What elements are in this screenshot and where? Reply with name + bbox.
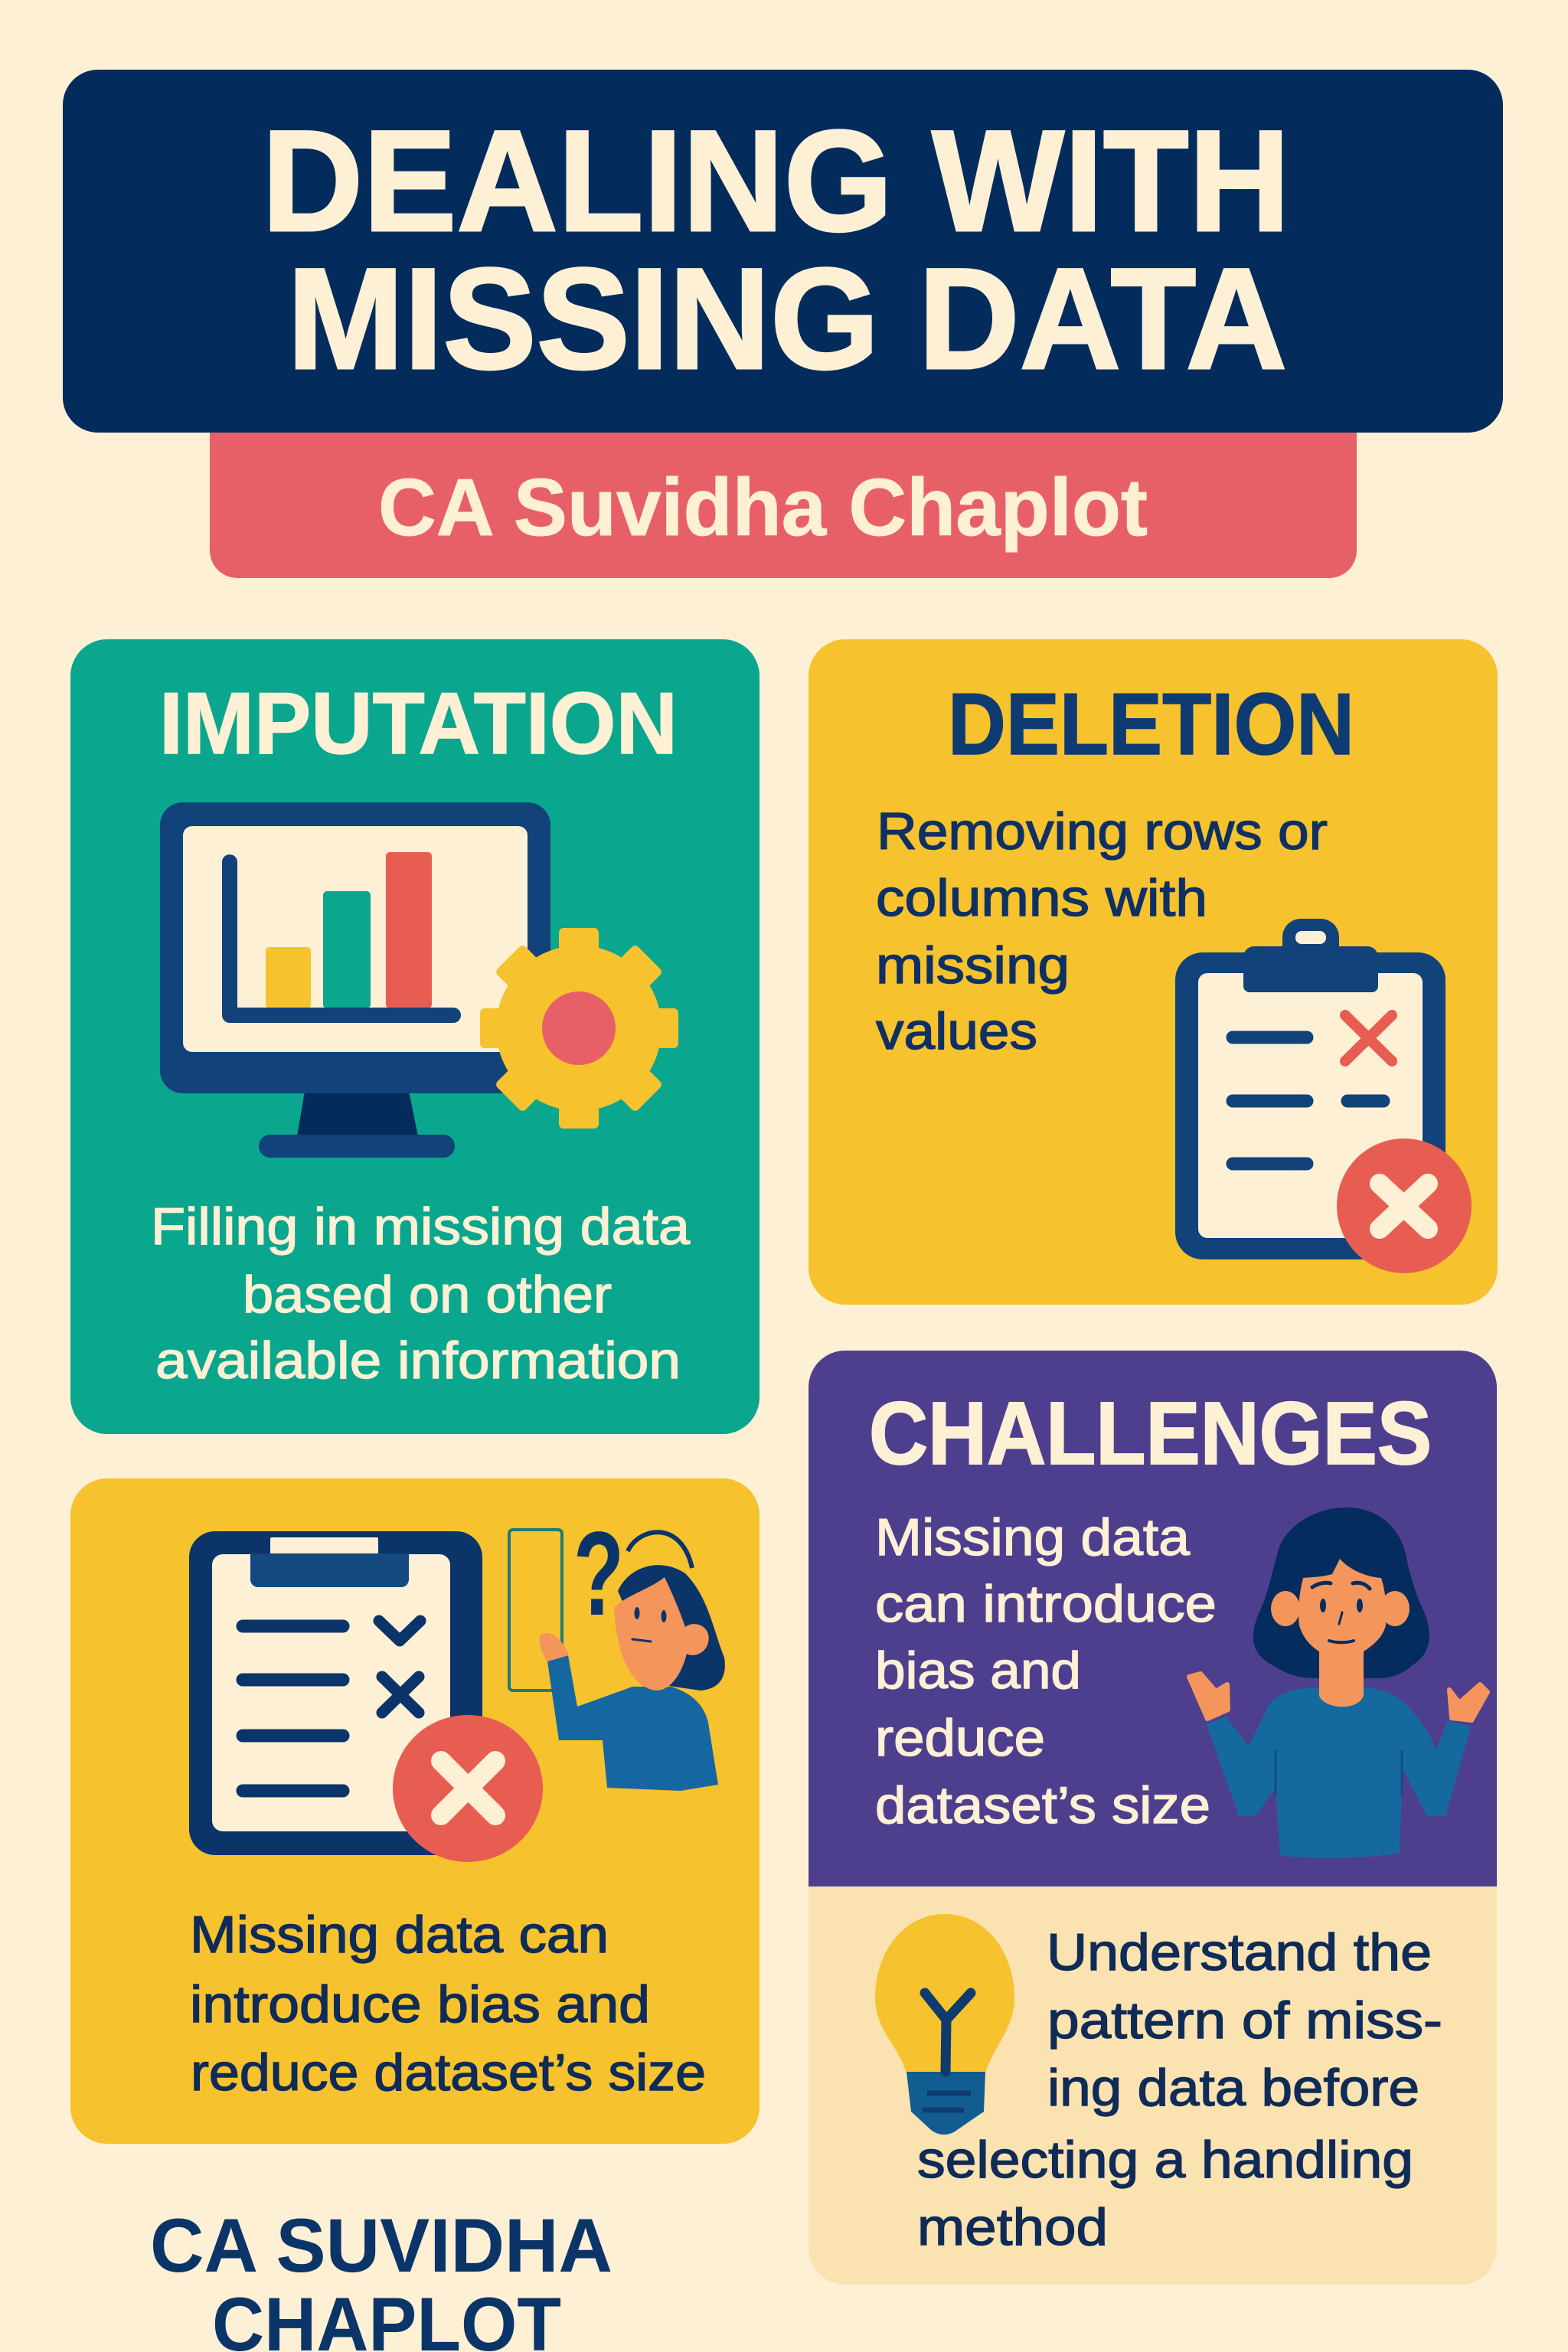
icon: light bulb (875, 1914, 1014, 2135)
imputation description (151, 1197, 690, 1390)
deletion description (876, 802, 1328, 1060)
deletion description: values (876, 1002, 1037, 1060)
icon: shrugging person (1189, 1508, 1488, 1858)
heading: deletion: DELETION (948, 676, 1354, 773)
challenges description: dataset’s size (875, 1776, 1210, 1834)
challenges description: Missing data (875, 1508, 1190, 1566)
title line 1: DEALING WITH (262, 100, 1290, 261)
panel: challenges (808, 1351, 1497, 1886)
icon: clipboard with errors (1175, 919, 1472, 1273)
panel: imputation (70, 639, 760, 1434)
imputation description: Filling in missing data (151, 1197, 690, 1256)
footer author name: CA SUVIDHA (150, 2203, 612, 2288)
heading: imputation: IMPUTATION (159, 675, 678, 773)
icon: monitor with bar chart (160, 802, 550, 1158)
icon: gear (480, 928, 678, 1129)
effects description: reduce dataset’s size (191, 2043, 706, 2102)
challenges description: reduce (875, 1709, 1045, 1767)
tip text: method (917, 2198, 1108, 2256)
imputation description: available information (155, 1331, 681, 1390)
challenges description (875, 1508, 1217, 1834)
effects description (190, 1906, 706, 2102)
title banner (63, 70, 1503, 433)
heading: challenges: CHALLENGES (869, 1383, 1432, 1483)
deletion description: missing (876, 936, 1070, 995)
tip text: pattern of miss- (1047, 1991, 1442, 2050)
footer author name (150, 2203, 612, 2352)
title line 2: MISSING DATA (287, 238, 1287, 399)
icon: thinking person (509, 1508, 725, 1791)
icon: checklist clipboard (189, 1531, 543, 1862)
challenges description: bias and (875, 1642, 1081, 1700)
subtitle banner (210, 413, 1357, 578)
deletion description: Removing rows or (877, 802, 1328, 861)
effects description: introduce bias and (190, 1975, 650, 2034)
panel: tip (808, 1886, 1497, 2285)
panel: missing data effects (70, 1478, 760, 2144)
panel: deletion (808, 639, 1498, 1305)
tip text: selecting a handling (917, 2131, 1413, 2189)
imputation description: based on other (243, 1266, 612, 1324)
tip text (917, 1923, 1442, 2256)
tip text: Understand the (1047, 1923, 1432, 1981)
tip text: ing data before (1047, 2059, 1419, 2117)
subtitle text: CA Suvidha Chaplot (378, 462, 1148, 553)
deletion description: columns with (876, 869, 1207, 927)
effects description: Missing data can (190, 1906, 609, 1964)
challenges description: can introduce (875, 1575, 1217, 1633)
icon: thinking person: ? (573, 1508, 624, 1641)
